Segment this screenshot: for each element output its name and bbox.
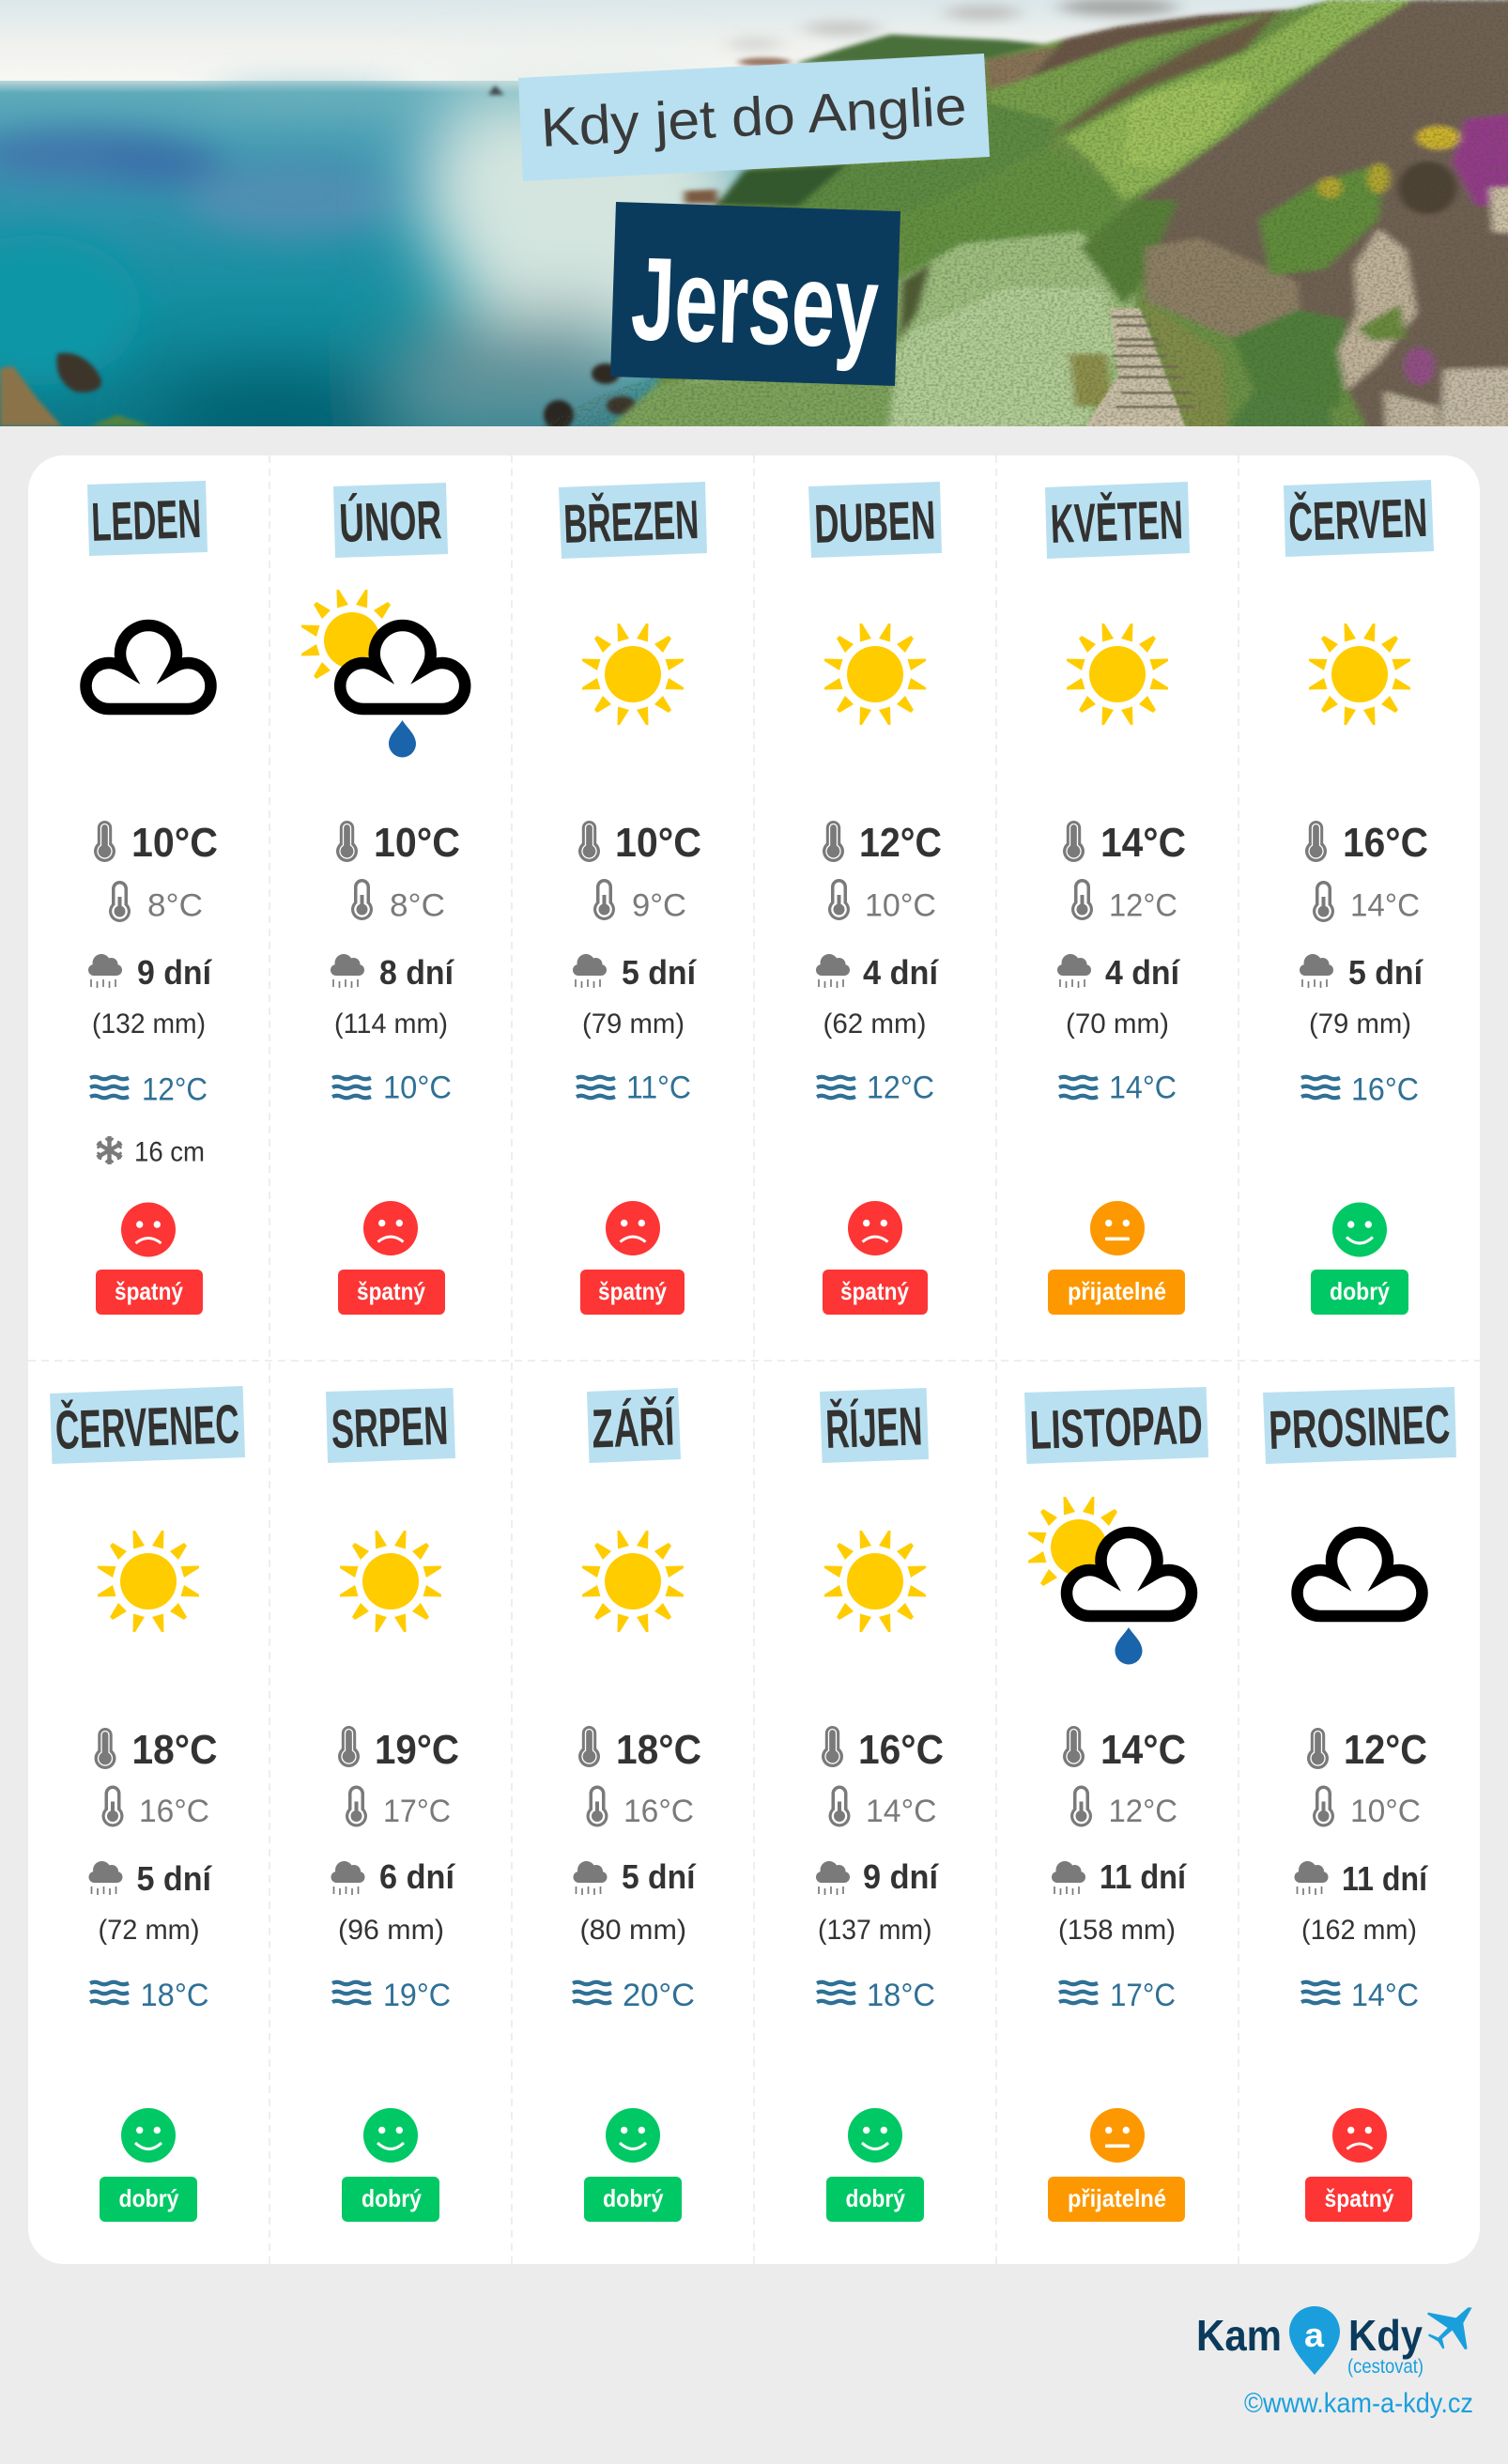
icon: thermometer low (593, 879, 615, 920)
icon: happy face (606, 2108, 660, 2163)
month label: ŘÍJEN: ŘÍJEN (824, 1395, 923, 1460)
logo: Kam a Kdy: Kam (1196, 2311, 1282, 2360)
precipitation: (158 mm) (1058, 1915, 1176, 1946)
rating badge: špatný: špatný (1324, 2184, 1394, 2212)
icon: thermometer low (1070, 1786, 1092, 1826)
icon: rain (573, 954, 607, 988)
icon: sad face (606, 1201, 660, 1255)
icon: sea waves (577, 1077, 615, 1098)
rating badge: přijatelné (1048, 2177, 1185, 2222)
min temperature: 14°C (866, 1794, 937, 1829)
min temperature: 12°C (1108, 1794, 1177, 1829)
rain days: 8 dní (379, 953, 454, 992)
precipitation: (114 mm) (334, 1009, 448, 1040)
rain days: 11 dní (1100, 1857, 1187, 1896)
max temperature: 16°C (1343, 820, 1428, 866)
logo: Kam a Kdy: (cestovat) (1347, 2356, 1423, 2378)
panel: ŘÍJEN (816, 1388, 944, 2222)
icon: happy face (848, 2108, 902, 2163)
rating badge: špatný (338, 1270, 445, 1315)
icon: sad face (848, 1201, 902, 1255)
rain days: 5 dní (622, 953, 697, 992)
icon: thermometer low (351, 879, 373, 920)
rating badge: dobrý (100, 2177, 197, 2222)
min temperature: 8°C (147, 888, 203, 924)
min temperature: 17°C (383, 1794, 451, 1829)
rain days: 5 dní (622, 1857, 696, 1896)
panel: ZÁŘÍ (573, 1388, 701, 2222)
icon: thermometer low (109, 881, 131, 922)
precipitation: (70 mm) (1066, 1009, 1169, 1040)
min temperature: 8°C (390, 888, 445, 924)
month label: ČERVENEC (50, 1386, 245, 1464)
min temperature: 14°C (1350, 888, 1420, 924)
panel: monthly climate card (28, 455, 1480, 2264)
month label: ČERVEN (1284, 480, 1434, 557)
month label: BŘEZEN: BŘEZEN (562, 489, 700, 555)
precipitation: (96 mm) (338, 1915, 444, 1946)
icon: sun (582, 624, 684, 725)
rating badge: dobrý: dobrý (362, 2184, 422, 2212)
header photo: coastal landscape (0, 0, 1508, 470)
month label: ÚNOR (333, 483, 448, 558)
max temperature: 19°C (375, 1727, 459, 1773)
icon: thermometer low (1313, 1786, 1334, 1826)
rain days: 9 dní (137, 953, 212, 992)
month label: ZÁŘÍ (587, 1388, 681, 1463)
month label: DUBEN: DUBEN (813, 490, 936, 555)
icon: thermometer high (578, 821, 600, 862)
precipitation: (79 mm) (582, 1009, 685, 1040)
icon: sea waves (817, 1982, 855, 2003)
stone steps (1085, 308, 1194, 426)
sea temperature: 16°C (1351, 1072, 1419, 1108)
month label: ŘÍJEN (820, 1388, 929, 1463)
icon: sun (1309, 624, 1410, 725)
month label: BŘEZEN (559, 482, 707, 559)
icon: sea waves (1059, 1077, 1098, 1098)
precipitation: (137 mm) (818, 1915, 931, 1946)
rating badge: špatný (823, 1270, 928, 1315)
sea temperature: 20°C (623, 1978, 695, 2013)
max temperature: 10°C (374, 820, 460, 866)
precipitation: (72 mm) (98, 1915, 199, 1946)
sea temperature: 17°C (1110, 1978, 1176, 2013)
min temperature: 10°C (865, 888, 936, 924)
precipitation: (80 mm) (580, 1915, 686, 1946)
sea temperature: 14°C (1351, 1978, 1419, 2013)
icon: rain (1300, 954, 1333, 988)
icon: rain (1057, 954, 1091, 988)
icon: thermometer low (101, 1786, 124, 1826)
precipitation: (79 mm) (1309, 1009, 1411, 1040)
icon: thermometer high (1063, 821, 1085, 862)
rating badge: dobrý (342, 2177, 439, 2222)
icon: rain (816, 954, 850, 988)
icon: thermometer low (586, 1786, 608, 1826)
icon: sea waves (90, 1982, 129, 2003)
panel: BŘEZEN (559, 482, 707, 1315)
max temperature: 10°C (615, 820, 701, 866)
panel: PROSINEC (1263, 1387, 1456, 2222)
min temperature: 9°C (632, 888, 686, 924)
min temperature: 10°C (1350, 1794, 1421, 1829)
month label: SRPEN (326, 1388, 455, 1463)
month label: KVĚTEN (1045, 482, 1190, 559)
month label: ČERVENEC: ČERVENEC (54, 1394, 240, 1461)
max temperature: 16°C (858, 1727, 944, 1773)
max temperature: 12°C (1344, 1727, 1427, 1773)
icon: rain (88, 954, 122, 988)
icon: sea waves (817, 1077, 855, 1098)
month label: KVĚTEN: KVĚTEN (1050, 489, 1184, 555)
month label: LISTOPAD (1024, 1387, 1208, 1464)
sea temperature: 18°C (867, 1978, 935, 2013)
icon: thermometer low (1313, 881, 1334, 922)
sea temperature: 19°C (383, 1978, 451, 2013)
icon: thermometer high (578, 1726, 600, 1767)
max temperature: 12°C (859, 820, 942, 866)
rating badge: dobrý (826, 2177, 924, 2222)
icon: rain (816, 1861, 850, 1895)
icon: sad face (1332, 2108, 1387, 2163)
icon: thermometer low (828, 1786, 851, 1826)
month label: DUBEN (808, 482, 942, 558)
icon: thermometer high (823, 821, 844, 862)
sea temperature: 10°C (383, 1070, 452, 1106)
land drawn in a crop-based coordinate system (607, 0, 1508, 426)
sea temperature: 12°C (142, 1072, 208, 1108)
icon: thermometer low (346, 1786, 367, 1826)
rain days: 9 dní (863, 1857, 939, 1896)
panel: ČERVENEC (50, 1386, 245, 2222)
icon: happy face (121, 2108, 176, 2163)
icon: sun (824, 624, 926, 725)
icon: cloud (86, 625, 210, 709)
icon: rain (331, 1861, 364, 1895)
max temperature: 18°C (131, 1727, 218, 1773)
icon: sea waves (1301, 1077, 1340, 1098)
icon: thermometer high (94, 1728, 116, 1769)
icon: sea waves (332, 1077, 371, 1098)
panel: ÚNOR (301, 483, 465, 1315)
icon: sea waves (1059, 1982, 1098, 2003)
month label: LEDEN (87, 481, 208, 556)
panel: LEDEN (86, 481, 218, 1315)
rating badge: špatný: špatný (598, 1277, 667, 1305)
icon: rain (1294, 1861, 1328, 1895)
icon: sea waves (1301, 1982, 1340, 2003)
icon: happy face (1332, 1202, 1387, 1256)
icon: snowflake (98, 1136, 122, 1164)
sea temperature: 18°C (141, 1978, 208, 2013)
rain days: 4 dní (863, 953, 939, 992)
month label: ÚNOR: ÚNOR (338, 489, 442, 554)
title tag: Kdy jet do Anglie: Kdy jet do Anglie (539, 75, 968, 159)
max temperature: 18°C (616, 1727, 701, 1773)
icon: thermometer high (1307, 1728, 1329, 1769)
max temperature: 14°C (1100, 820, 1186, 866)
icon: rain (573, 1861, 607, 1895)
precipitation: (132 mm) (92, 1009, 206, 1040)
icon: sun (1067, 624, 1168, 725)
max temperature: 14°C (1100, 1727, 1186, 1773)
rating badge: dobrý: dobrý (118, 2184, 179, 2212)
icon: airplane (1427, 2307, 1472, 2349)
title tag: Kdy jet do Anglie (518, 54, 990, 181)
rating badge: dobrý: dobrý (603, 2184, 664, 2212)
month label: LEDEN: LEDEN (90, 488, 202, 553)
icon: sea waves (332, 1982, 371, 2003)
rating badge: špatný: špatný (357, 1277, 425, 1305)
precipitation: (62 mm) (823, 1009, 926, 1040)
rating badge: dobrý: dobrý (1330, 1277, 1390, 1305)
panel: SRPEN (326, 1388, 459, 2222)
rating badge: špatný: špatný (840, 1277, 909, 1305)
sea temperature: 11°C (626, 1070, 691, 1106)
icon: thermometer high (94, 821, 115, 862)
icon: thermometer high (1063, 1726, 1085, 1767)
rating badge: přijatelné: přijatelné (1068, 2184, 1166, 2212)
heading: Jersey: Jersey (629, 232, 881, 373)
icon: neutral face (1090, 1201, 1145, 1255)
rating badge: špatný: špatný (115, 1277, 183, 1305)
icon: cloud (1298, 1532, 1422, 1616)
icon: sad face (363, 1201, 418, 1255)
heading: Jersey (610, 202, 900, 386)
precipitation: (162 mm) (1301, 1915, 1417, 1946)
icon: sad face (121, 1202, 176, 1256)
panel: ČERVEN (1284, 480, 1434, 1315)
rating badge: přijatelné: přijatelné (1068, 1277, 1166, 1305)
month label: SRPEN: SRPEN (331, 1395, 449, 1460)
icon: sea waves (573, 1982, 611, 2003)
icon: sun (98, 1531, 199, 1632)
rain days: 5 dní (137, 1859, 212, 1898)
icon: thermometer high (1305, 821, 1327, 862)
rain days: 5 dní (1348, 953, 1423, 992)
icon: thermometer high (822, 1726, 843, 1767)
sea temperature: 14°C (1109, 1070, 1177, 1106)
icon: sun (340, 1531, 441, 1632)
rating badge: špatný (1305, 2177, 1412, 2222)
rain days: 11 dní (1342, 1859, 1428, 1898)
icon: sun (582, 1531, 684, 1632)
icon: rain (331, 954, 364, 988)
rating badge: dobrý: dobrý (845, 2184, 905, 2212)
snowfall: 16 cm (134, 1136, 205, 1168)
icon: thermometer low (828, 879, 850, 920)
min temperature: 12°C (1109, 888, 1177, 924)
min temperature: 16°C (623, 1794, 694, 1829)
icon: neutral face (1090, 2108, 1145, 2163)
logo: Kam a Kdy (1196, 2306, 1472, 2378)
rating badge: přijatelné (1048, 1270, 1185, 1315)
rating badge: špatný (96, 1270, 203, 1315)
icon: sea waves (90, 1077, 129, 1098)
website credit: ©www.kam-a-kdy.cz (1244, 2388, 1473, 2419)
icon: happy face (363, 2108, 418, 2163)
rain days: 4 dní (1105, 953, 1180, 992)
panel: DUBEN (808, 482, 942, 1315)
panel: LISTOPAD (1024, 1387, 1208, 2222)
min temperature: 16°C (139, 1794, 209, 1829)
icon: sun behind cloud with drop (1028, 1497, 1192, 1664)
icon: sun behind cloud with drop (301, 590, 465, 757)
icon: thermometer high (336, 821, 358, 862)
icon: sun (824, 1531, 926, 1632)
icon: map pin: a (1304, 2316, 1325, 2354)
icon: rain (1052, 1861, 1085, 1895)
month label: ZÁŘÍ: ZÁŘÍ (591, 1395, 677, 1459)
rating badge: dobrý (584, 2177, 682, 2222)
icon: map pin (1289, 2306, 1340, 2375)
max temperature: 10°C (131, 820, 218, 866)
icon: thermometer low (1071, 879, 1093, 920)
icon: rain (88, 1861, 122, 1895)
logo: Kam a Kdy: Kdy (1348, 2311, 1423, 2360)
icon: thermometer high (338, 1726, 360, 1767)
rating badge: špatný (580, 1270, 685, 1315)
sea temperature: 12°C (867, 1070, 934, 1106)
rating badge: dobrý (1311, 1270, 1408, 1315)
month label: LISTOPAD: LISTOPAD (1029, 1394, 1204, 1461)
panel: KVĚTEN (1045, 482, 1190, 1315)
rain days: 6 dní (379, 1857, 455, 1896)
